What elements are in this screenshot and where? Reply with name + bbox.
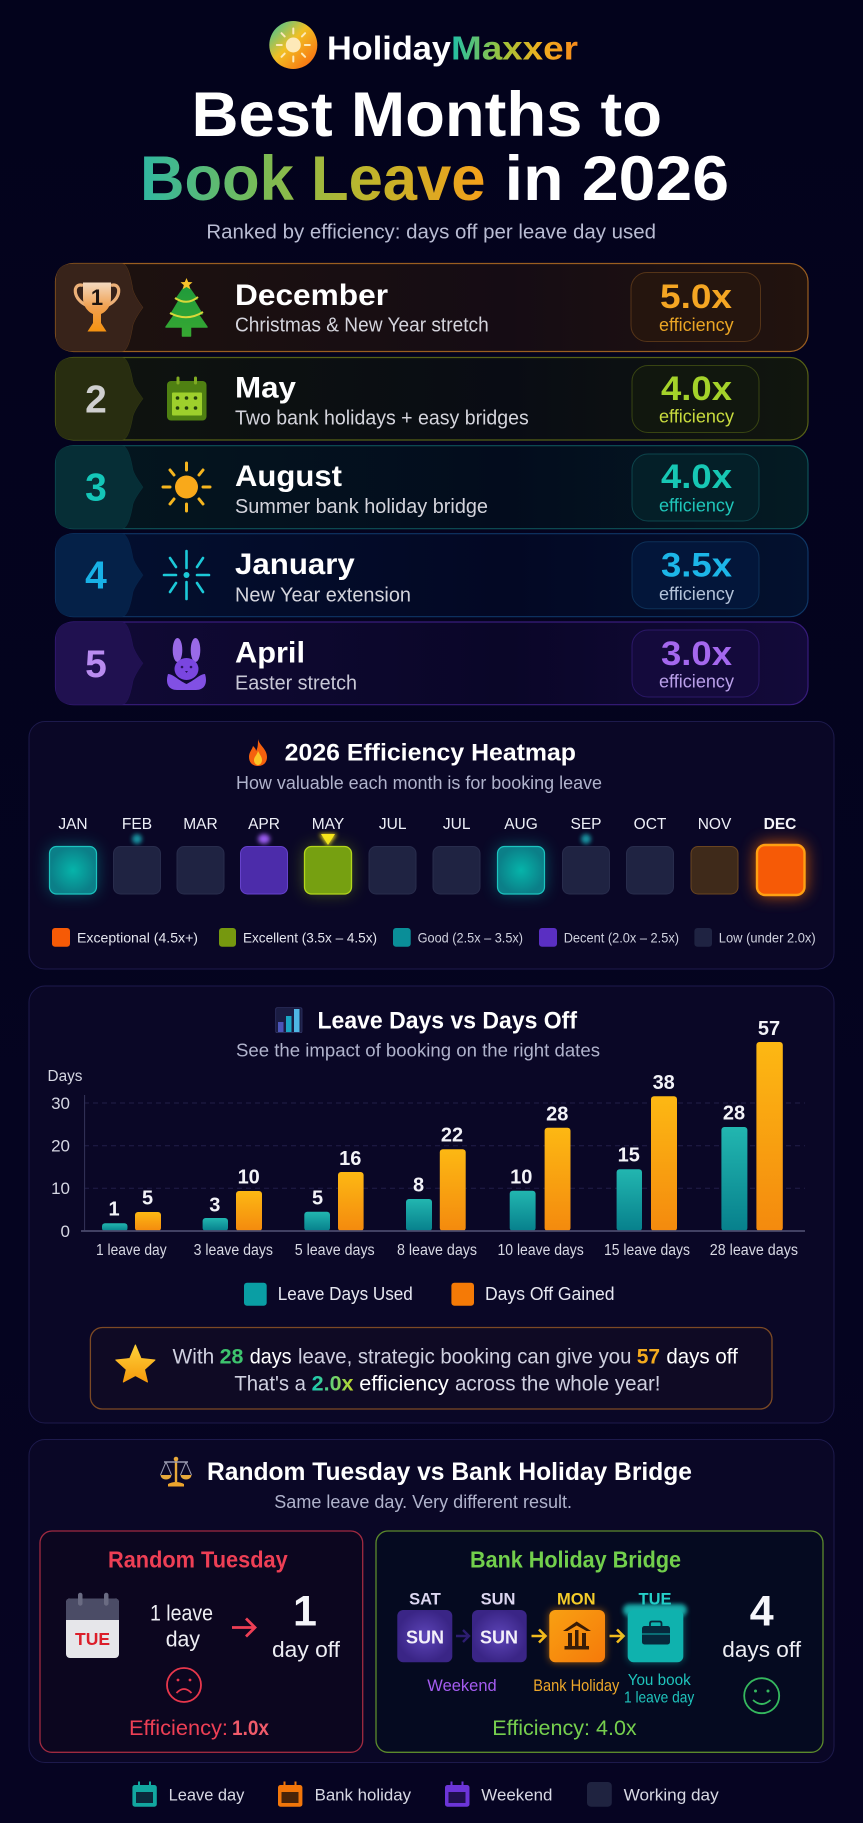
heatmap legend [52, 928, 816, 947]
group: 28 leave days: 28 leave days [710, 1242, 798, 1259]
result: 1 day off: 1 [293, 1588, 317, 1636]
bar chart [48, 1018, 805, 1259]
group: 15 leave days: 15 leave days [604, 1242, 690, 1259]
efficiency badge: efficiency [659, 584, 734, 604]
tile: AUG [498, 816, 544, 894]
result: 1 day off [272, 1588, 341, 1662]
icon: scales [160, 1457, 192, 1486]
chart legend [244, 1283, 614, 1306]
callout text [172, 1345, 738, 1396]
tile: JUL second: JUL [443, 816, 471, 833]
legend: bank holiday [278, 1782, 411, 1807]
efficiency badge: 4.0x [661, 370, 732, 408]
description: Christmas & New Year stretch [235, 315, 489, 337]
day labels: MON [557, 1590, 596, 1608]
group: 1 leave day: 1 leave day [96, 1242, 167, 1259]
row: December [56, 264, 808, 352]
label: you book: 1 leave day [624, 1690, 694, 1707]
day labels [409, 1590, 672, 1608]
efficiency badge: 5.0x [660, 278, 732, 316]
month name: August [235, 460, 342, 493]
group: 10 leave days: 10 leave days [498, 1242, 584, 1259]
group: 8 leave days: 8 leave days [397, 1242, 477, 1259]
legend: days off gained [451, 1283, 614, 1306]
group: 28 leave days: 57 [758, 1018, 780, 1040]
group: 3 leave days: 10 [238, 1167, 260, 1189]
result: 4 days off [722, 1588, 802, 1662]
callout text: leave, strategic booking can give you [298, 1345, 631, 1368]
efficiency label [129, 1717, 269, 1740]
group: 15 leave days [604, 1072, 690, 1259]
icon: christmas tree [166, 278, 207, 336]
arrow: faint [456, 1630, 469, 1642]
label: weekend: Weekend [427, 1677, 497, 1695]
tile: MAY: MAY [312, 816, 344, 833]
group: 1 leave day: 1 [108, 1199, 120, 1221]
group: 28 leave days: 28 [723, 1102, 745, 1124]
legend: weekend [445, 1782, 552, 1807]
row: August [56, 446, 808, 529]
icon: trophy with 1: 1 [91, 285, 103, 310]
icon: star [116, 1345, 155, 1382]
group: 1 leave day [96, 1187, 167, 1259]
efficiency badge: 3.5x [661, 547, 732, 585]
efficiency badge [632, 366, 759, 432]
brand name: Holiday [327, 29, 452, 66]
rank number: 2 [85, 379, 107, 422]
efficiency label: 1.0x [232, 1717, 269, 1740]
tile: FEB [114, 816, 160, 894]
month name: January [235, 548, 355, 581]
callout text: With [172, 1345, 214, 1368]
group: 5 leave days [295, 1148, 375, 1259]
legend: leave day: Leave day [169, 1786, 245, 1805]
title [140, 80, 729, 214]
legend: decent [539, 928, 679, 947]
legend: weekend: Weekend [481, 1786, 552, 1805]
callout text: efficiency [359, 1373, 449, 1396]
logo [269, 21, 578, 69]
efficiency badge: efficiency [659, 407, 734, 427]
panel: bank holiday bridge [376, 1531, 823, 1752]
callout text: 28 [220, 1345, 244, 1368]
tile: leave day TUE [623, 1604, 687, 1662]
icon: bunny [167, 638, 206, 690]
efficiency badge: efficiency [659, 672, 734, 692]
tile: JUL [369, 816, 416, 894]
result: 4 days off: days off [722, 1637, 802, 1662]
title: in 2026 [505, 144, 729, 214]
legend: leave days used: Leave Days Used [278, 1284, 413, 1304]
icon: green calendar [167, 376, 206, 420]
arrow: to tuesday [610, 1630, 624, 1642]
subtitle: Ranked by efficiency: days off per leave day used [206, 222, 656, 244]
efficiency badge [632, 542, 759, 609]
tile: JAN: JAN [58, 816, 88, 833]
tile: MAY [304, 816, 352, 894]
efficiency badge [632, 454, 759, 521]
efficiency badge: efficiency [659, 315, 734, 335]
rank number: 3 [85, 467, 107, 510]
legend: days off gained: Days Off Gained [485, 1284, 614, 1304]
efficiency badge: efficiency [659, 496, 734, 516]
tile: JUL: JUL [379, 816, 407, 833]
group: 15 leave days: 15 [618, 1145, 640, 1167]
tile: APR: APR [248, 816, 280, 833]
group: 8 leave days: 22 [441, 1125, 463, 1147]
month name: April [235, 637, 305, 670]
group: 10 leave days: 10 [510, 1167, 532, 1189]
y axis title: Days [48, 1068, 83, 1085]
row: April [56, 622, 808, 705]
icon: sad face [167, 1668, 201, 1702]
result: 4 days off: 4 [750, 1588, 774, 1636]
callout [90, 1328, 772, 1409]
tile: DEC: DEC [764, 816, 796, 833]
group: 8 leave days: 8 [413, 1175, 424, 1197]
y axis ticks: 30 [51, 1094, 70, 1113]
label: you book: You book [628, 1672, 692, 1689]
legend: excellent: Excellent (3.5x – 4.5x) [243, 929, 377, 945]
card title: Random Tuesday [108, 1547, 288, 1573]
tile: JUL second [433, 816, 480, 894]
day labels: SUN [481, 1590, 515, 1608]
panel: random tuesday vs bank holiday bridge [29, 1440, 834, 1762]
month tiles [49, 816, 806, 896]
y axis ticks [51, 1094, 70, 1241]
text: 1 leave day: day [166, 1627, 200, 1652]
brand name: Maxxer [451, 29, 578, 66]
month name: December [235, 279, 388, 312]
y axis ticks: 0 [61, 1222, 70, 1241]
tile: MAR: MAR [183, 816, 218, 833]
result: 1 day off: day off [272, 1637, 341, 1662]
legend: leave day [132, 1782, 245, 1807]
arrow [232, 1618, 255, 1636]
tile: weekend SAT: SUN [406, 1627, 444, 1647]
icon: flame [249, 739, 267, 766]
legend: decent: Decent (2.0x – 2.5x) [564, 929, 679, 945]
efficiency badge: 3.0x [661, 635, 732, 673]
group: 3 leave days [194, 1167, 273, 1259]
tile: FEB: FEB [122, 816, 152, 833]
legend: leave days used [244, 1283, 413, 1306]
heading: Leave Days vs Days Off [318, 1007, 578, 1034]
callout text: days [250, 1345, 292, 1368]
description: Easter stretch [235, 672, 357, 694]
day labels: SAT [409, 1590, 441, 1608]
group: 3 leave days: 3 leave days [194, 1242, 273, 1259]
y axis ticks: 20 [51, 1136, 70, 1156]
description: New Year extension [235, 585, 411, 607]
group: 15 leave days: 38 [653, 1072, 675, 1094]
legend: working day [587, 1782, 719, 1807]
callout text: 2.0x [312, 1373, 354, 1396]
icon: trophy with 1 [75, 282, 119, 332]
icon: sun [163, 463, 210, 511]
icon: TUE calendar [66, 1593, 119, 1658]
row: January [56, 534, 808, 617]
subheading: Same leave day. Very different result. [274, 1492, 572, 1512]
card title: Bank Holiday Bridge [470, 1547, 681, 1573]
panel: efficiency heatmap [29, 722, 834, 969]
group: 5 leave days: 5 [312, 1187, 323, 1209]
group: 10 leave days [498, 1104, 584, 1259]
glow accents above months [49, 834, 806, 896]
legend: low [694, 928, 816, 947]
tile: APR [240, 816, 288, 894]
legend: working day: Working day [624, 1786, 719, 1805]
efficiency badge [632, 630, 759, 697]
efficiency badge: 4.0x [661, 458, 732, 496]
rank number: 5 [85, 643, 107, 686]
legend: bank holiday: Bank holiday [315, 1786, 411, 1805]
tile: NOV [691, 816, 738, 894]
month name: May [235, 372, 296, 405]
label: bank holiday: Bank Holiday [533, 1677, 620, 1695]
group: 10 leave days: 28 [546, 1104, 568, 1126]
tile: bank holiday MON [549, 1610, 605, 1662]
icon: logo sun [269, 21, 317, 69]
callout text: 57 [637, 1345, 660, 1368]
tile: weekend SAT [397, 1610, 452, 1662]
icon: smiley [744, 1678, 779, 1713]
tile: NOV: NOV [698, 816, 732, 833]
group: 1 leave day: 5 [142, 1187, 153, 1209]
tile: AUG: AUG [504, 816, 538, 833]
legend: good [393, 928, 523, 947]
rank number: 4 [85, 555, 107, 598]
panel: random tuesday [40, 1531, 363, 1752]
tile: JAN [50, 816, 96, 894]
title: Book Leave [140, 144, 486, 214]
panel: ranking list [56, 264, 808, 705]
tile: weekend SUN [472, 1610, 527, 1662]
icon: bar chart [276, 1008, 302, 1033]
tile: SEP [562, 816, 610, 894]
efficiency badge [631, 272, 760, 342]
group: 5 leave days: 5 leave days [295, 1242, 375, 1259]
tile: SEP: SEP [570, 816, 602, 833]
y axis ticks: 10 [51, 1179, 70, 1198]
title: Best Months to [192, 80, 662, 150]
tile: OCT [626, 816, 674, 894]
callout text: days off [666, 1345, 738, 1368]
group: 5 leave days: 16 [339, 1148, 361, 1170]
callout text: That's a [234, 1373, 306, 1396]
subheading: How valuable each month is for booking leave [236, 773, 602, 793]
heading: 2026 Efficiency Heatmap [285, 740, 576, 767]
icon: TUE calendar: TUE [75, 1629, 110, 1649]
row: May [56, 358, 808, 440]
legend: exceptional: Exceptional (4.5x+) [77, 929, 198, 945]
group: 28 leave days [710, 1018, 798, 1259]
legend: good: Good (2.5x – 3.5x) [418, 929, 523, 945]
day labels: TUE [638, 1590, 672, 1608]
group: 3 leave days: 3 [209, 1195, 220, 1217]
heading: Random Tuesday vs Bank Holiday Bridge [207, 1458, 692, 1486]
tile: MAR [177, 816, 224, 894]
subheading: See the impact of booking on the right dates [236, 1041, 600, 1061]
icon: firework burst [164, 551, 209, 599]
tile: weekend SUN: SUN [480, 1627, 518, 1647]
text: 1 leave day [150, 1601, 213, 1652]
description: Summer bank holiday bridge [235, 496, 488, 518]
legend: low: Low (under 2.0x) [719, 929, 816, 945]
efficiency label: Efficiency: [129, 1717, 228, 1740]
label: you book [624, 1672, 694, 1707]
group: 8 leave days [397, 1125, 477, 1259]
bottom legend [132, 1782, 719, 1807]
text: 1 leave day: 1 leave [150, 1601, 213, 1626]
panel: leave days vs days off [29, 986, 834, 1423]
efficiency label: Efficiency: 4.0x [492, 1717, 637, 1740]
callout text: across the whole year! [455, 1373, 660, 1396]
description: Two bank holidays + easy bridges [235, 408, 529, 430]
tile: DEC [757, 816, 804, 895]
tile: OCT: OCT [634, 816, 667, 833]
arrow: to monday [532, 1630, 546, 1642]
